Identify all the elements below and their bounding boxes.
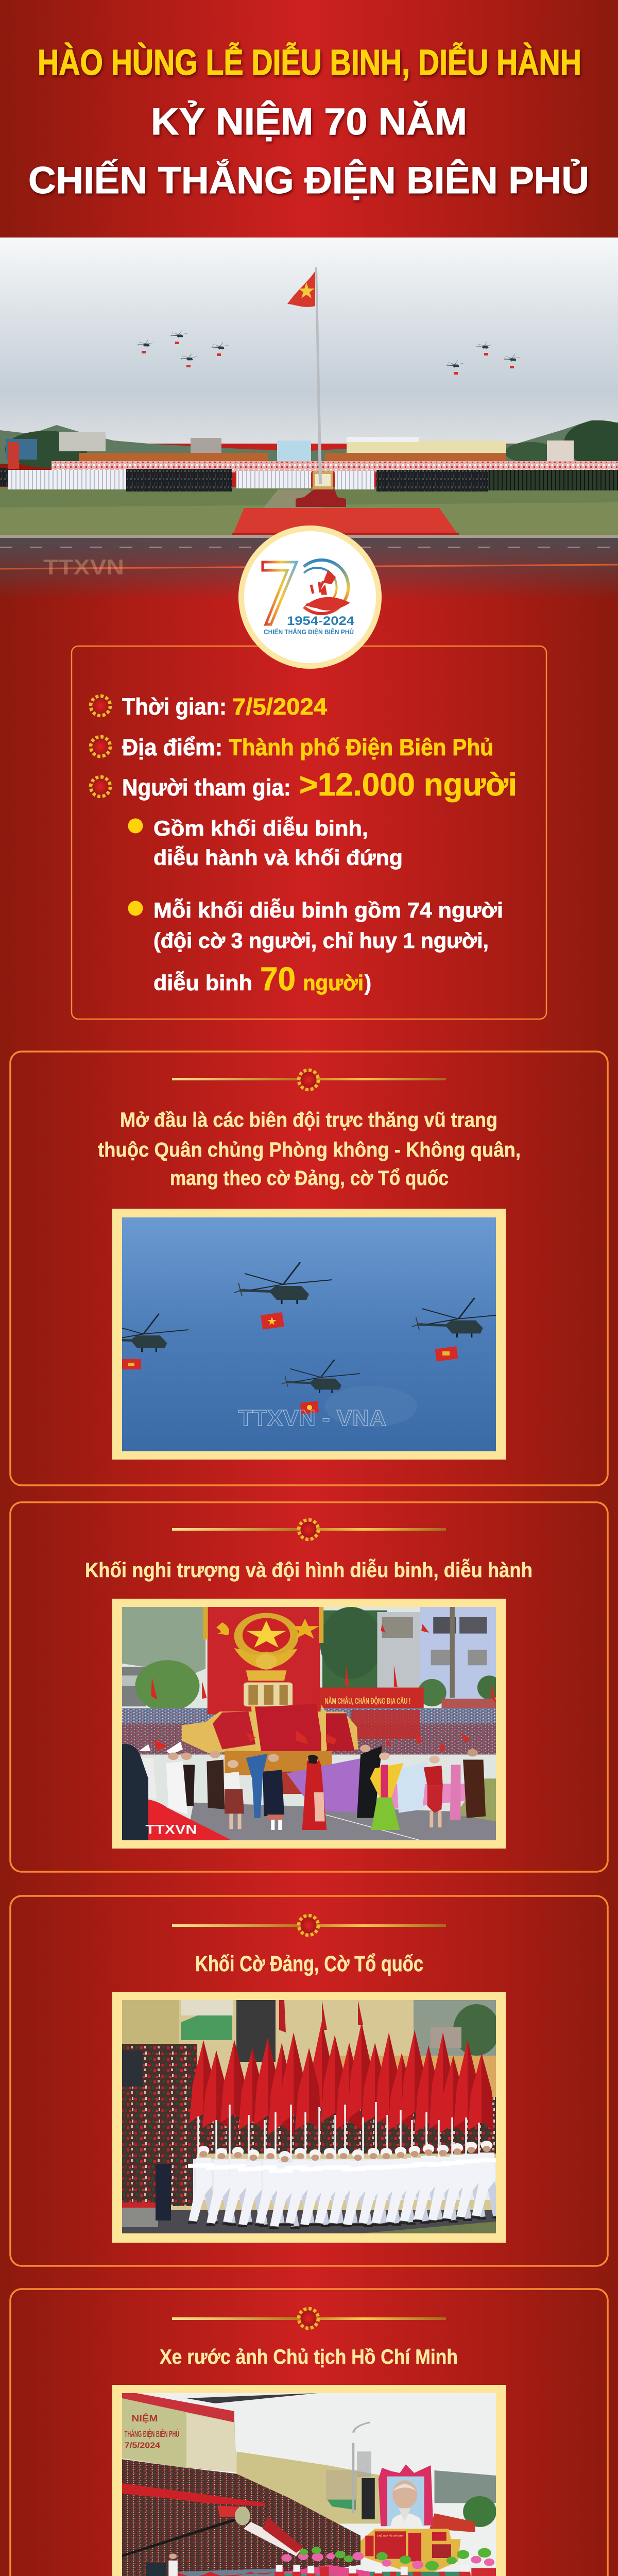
helicopter with national flag low xyxy=(282,1360,360,1414)
flags and flowers xyxy=(151,1624,496,1751)
text: participants: Người tham gia: xyxy=(122,774,291,801)
stand building and banner: NIỆM xyxy=(132,2413,158,2424)
text: time: Thời gian: xyxy=(122,693,227,720)
photo: flag bearers xyxy=(122,2000,496,2233)
photo: ceremonial float with emblem xyxy=(122,1607,496,1840)
heading: Xe rước ảnh Chủ tịch Hồ Chí Minh xyxy=(160,2346,458,2368)
panel: party and national flag block xyxy=(10,1896,608,2266)
divider ornament xyxy=(172,1520,446,1539)
barrier xyxy=(177,2568,284,2576)
text: block detail xyxy=(153,897,503,997)
performers xyxy=(139,1741,486,1830)
photo frame xyxy=(112,1992,506,2243)
stand building and banner: THẮNG ĐIỆN BIÊN PHỦ xyxy=(125,2429,179,2439)
title: KỶ NIỆM 70 NĂM xyxy=(151,101,467,143)
marchers xyxy=(188,2141,507,2229)
emblem book xyxy=(203,1607,323,1714)
crowd in stand xyxy=(122,2459,360,2576)
text: block detail: diễu binh xyxy=(153,970,252,995)
panel: event summary xyxy=(72,646,546,1019)
text: block detail: ) xyxy=(365,971,371,995)
text: composition: Gồm khối diễu binh, xyxy=(153,816,368,840)
watermark TTXVN on hero: TTXVN xyxy=(43,555,124,579)
flag poles xyxy=(198,2102,479,2177)
text: participants xyxy=(122,767,517,803)
text: place: Địa điểm: xyxy=(122,734,222,760)
photo: helicopters in sky xyxy=(122,1217,496,1451)
red flower border xyxy=(146,1799,232,1840)
road xyxy=(122,2210,496,2233)
hero photo: flag ceremony at the square xyxy=(0,238,618,607)
portrait and lotus xyxy=(379,2464,433,2526)
logo: 70 years: 1954-2024 xyxy=(287,614,355,628)
logo: 70 years: CHIẾN THẮNG ĐIỆN BIÊN PHỦ xyxy=(264,628,354,636)
road and grass xyxy=(186,1803,496,1840)
helicopter with national flag xyxy=(234,1262,332,1330)
text: participants: >12.000 người xyxy=(299,767,517,803)
float scrolls: CHỦ TỊCH HỒ CHÍ MINH xyxy=(377,2534,404,2537)
divider ornament xyxy=(172,2309,446,2328)
icon: dot two xyxy=(128,901,143,916)
panel: ceremonial block xyxy=(10,1502,608,1872)
purple veils xyxy=(286,1758,380,1813)
photo frame xyxy=(112,1599,506,1849)
icon: bullet place xyxy=(91,737,110,756)
watermark: TTXVN - VNA xyxy=(238,1405,386,1431)
photo frame xyxy=(112,2385,506,2576)
icon: dot one xyxy=(128,818,143,834)
text: composition xyxy=(153,816,403,870)
title xyxy=(28,42,589,201)
text: place: Thành phố Điện Biên Phủ xyxy=(229,734,493,760)
watermark: TTXVN xyxy=(145,1822,197,1837)
heading: thuộc Quân chủng Phòng không - Không quân, xyxy=(98,1139,521,1161)
text: block detail: (đội cờ 3 người, chỉ huy 1 người, xyxy=(153,928,489,953)
text: block detail: người xyxy=(303,971,364,995)
panel: helicopters xyxy=(10,1052,608,1485)
text: block detail: Mỗi khối diễu binh gồm 74 người xyxy=(153,897,503,922)
text: block detail: 70 xyxy=(260,960,296,997)
stand building and banner: 7/5/2024 xyxy=(125,2441,160,2450)
heading: Khối nghi trượng và đội hình diễu binh, diễu hành xyxy=(85,1558,533,1582)
soldier foreground xyxy=(122,1744,148,1840)
text: place xyxy=(122,734,493,760)
text: composition: diễu hành và khối đứng xyxy=(153,845,403,870)
title: CHIẾN THẮNG ĐIỆN BIÊN PHỦ xyxy=(28,160,589,201)
heading xyxy=(98,1109,521,1190)
icon: bullet time xyxy=(91,696,110,716)
float scrolls xyxy=(360,2529,460,2576)
panel: Ho Chi Minh portrait float xyxy=(10,2289,608,2576)
heading: mang theo cờ Đảng, cờ Tổ quốc xyxy=(170,1167,449,1190)
divider ornament xyxy=(172,1916,446,1935)
flags xyxy=(190,2000,494,2135)
icon: bullet participants xyxy=(91,777,110,796)
helicopter with party flag xyxy=(98,1314,188,1369)
logo: 70 years xyxy=(238,526,382,669)
heading: Khối Cờ Đảng, Cờ Tổ quốc xyxy=(195,1952,423,1976)
heading: Mở đầu là các biên đội trực thăng vũ trang xyxy=(120,1109,497,1131)
pink band and children xyxy=(284,2565,370,2576)
text: time: 7/5/2024 xyxy=(232,693,327,720)
red scroll float xyxy=(182,1704,358,1794)
divider ornament xyxy=(172,1070,446,1090)
stand building and banner xyxy=(122,2393,318,2472)
photo frame xyxy=(112,1209,506,1460)
helicopter with party flag right xyxy=(412,1298,505,1362)
seated crowd xyxy=(122,2044,197,2206)
photo: portrait float passing the stand xyxy=(122,2393,496,2576)
text: time xyxy=(122,693,327,720)
